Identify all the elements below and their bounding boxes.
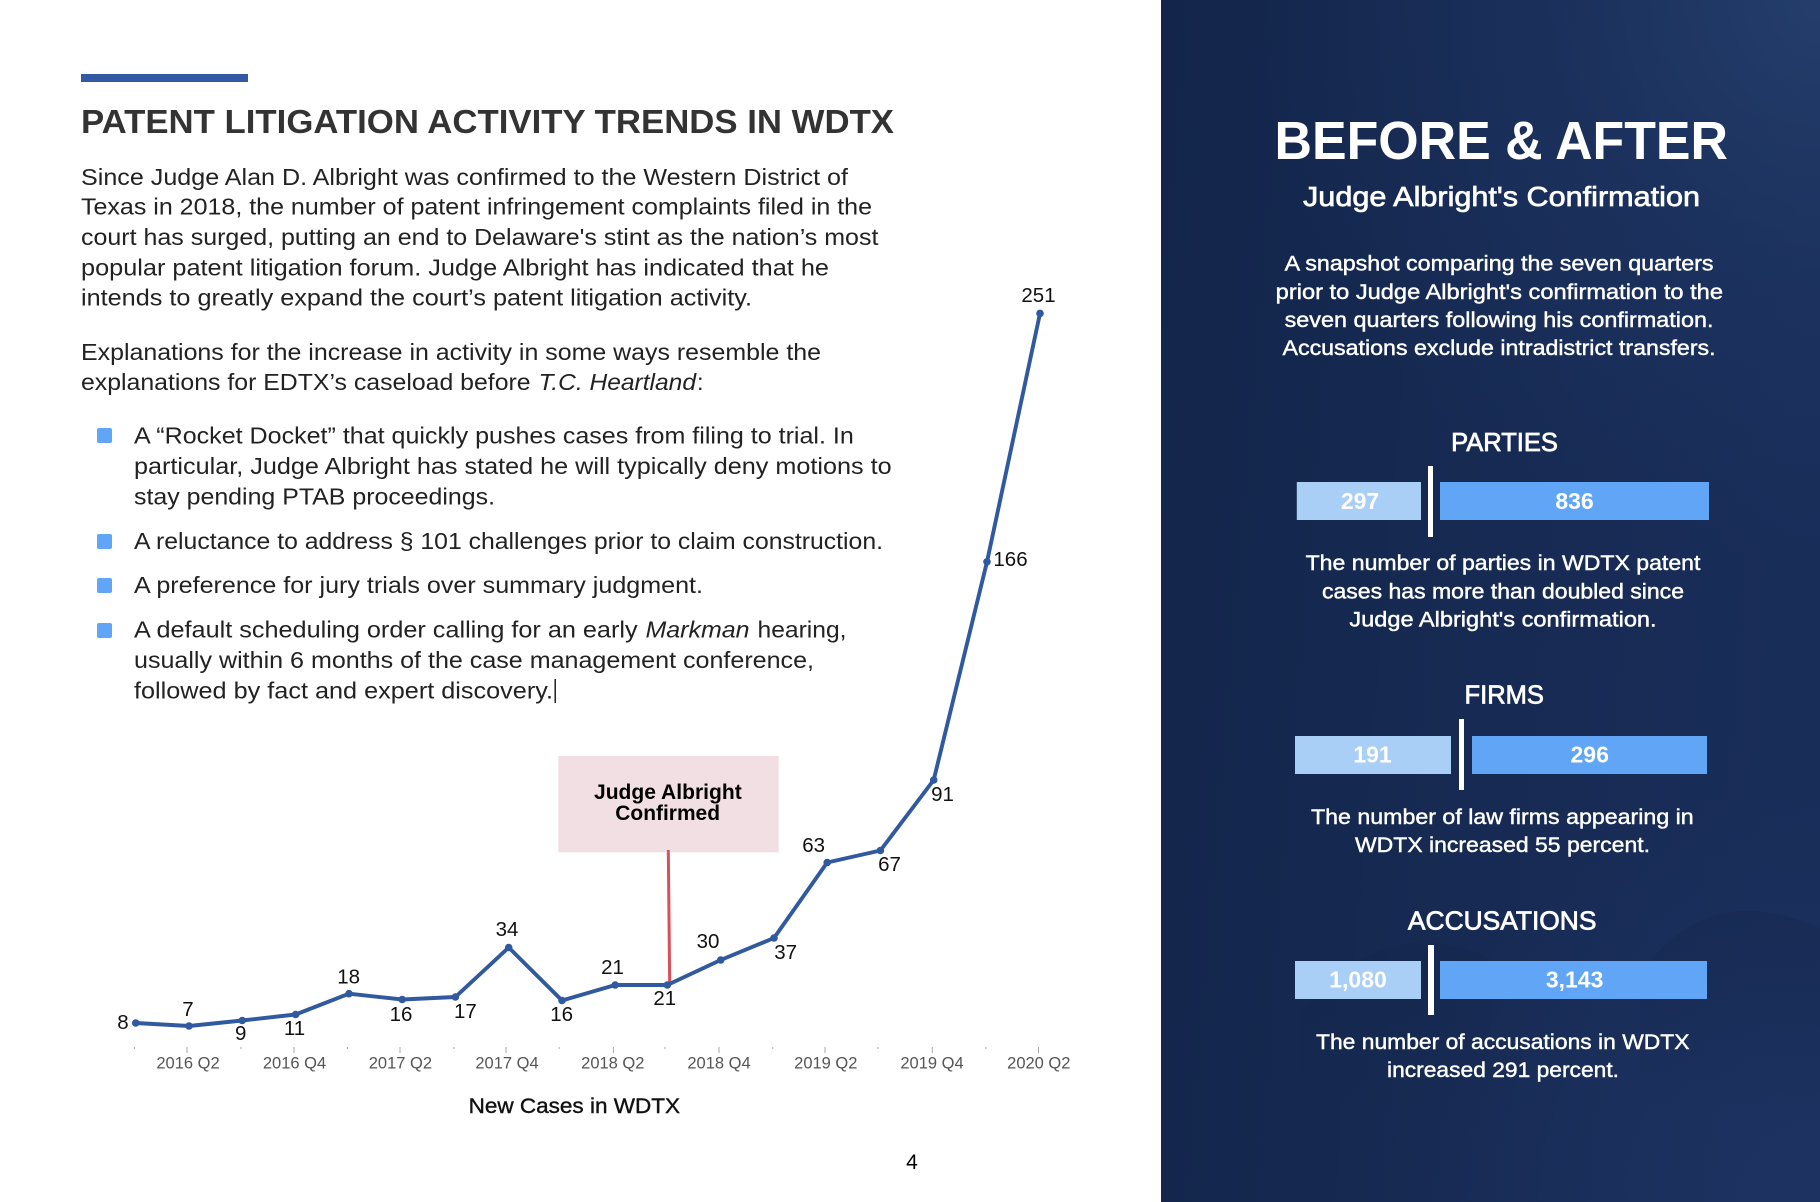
bullet text 1: stay pending PTAB proceedings.: [134, 484, 495, 510]
text block: intro paragraph: Texas in 2018, the number of patent infringement complaints filed in the: [81, 194, 872, 220]
bar: parties before: [1297, 482, 1421, 520]
data labels: 21: [653, 987, 676, 1010]
text block: intro paragraph: court has surged, putting an end to Delaware's stint as the nation’s most: [81, 224, 879, 250]
callout: Judge Albright confirmed: Judge Albright: [594, 780, 742, 804]
data labels: 17: [454, 1000, 477, 1023]
panel background: [1161, 0, 1820, 1202]
heading: accusations: ACCUSATIONS: [1408, 907, 1596, 935]
callout: Judge Albright confirmed: [558, 756, 779, 852]
bullet text 4: hearing,: [758, 617, 846, 643]
intro text: Accusations exclude intradistrict transfers.: [1282, 336, 1716, 360]
bullet text 3: A preference for jury trials over summary judgment.: [134, 572, 703, 598]
section: parties: [1297, 429, 1709, 632]
x axis: [134, 1047, 1070, 1072]
text block: explanations paragraph: Explanations for the increase in activity in some ways resemble the: [81, 339, 821, 365]
text block: explanations paragraph: explanations for EDTX’s caseload before: [81, 369, 531, 395]
data labels: 7: [182, 998, 194, 1021]
accent bar: [81, 74, 248, 82]
caption: accusations: increased 291 percent.: [1387, 1058, 1619, 1082]
caption: accusations: [1316, 1030, 1690, 1082]
data labels: 251: [1021, 284, 1056, 307]
page number: 4: [906, 1151, 918, 1174]
data labels: 67: [878, 853, 901, 876]
data series: [132, 310, 1044, 1030]
value: accusations before: 1,080: [1329, 966, 1387, 992]
data labels: 30: [697, 930, 719, 953]
caption: parties: The number of parties in WDTX patent: [1306, 551, 1700, 575]
caption: firms: [1311, 805, 1694, 857]
bullet text 4: Markman: [646, 617, 750, 643]
data labels: 18: [337, 966, 360, 988]
caption: parties: cases has more than doubled since: [1322, 580, 1684, 604]
intro text: prior to Judge Albright's confirmation to the: [1276, 280, 1723, 304]
bullet marker 2: [97, 534, 112, 549]
bullet text 4: [134, 617, 846, 704]
text block: explanations paragraph: T.C. Heartland: [538, 369, 697, 395]
heading: firms: FIRMS: [1465, 682, 1544, 710]
value: parties before: 297: [1341, 488, 1379, 514]
heading: parties: PARTIES: [1451, 429, 1558, 457]
value: firms before: 191: [1353, 742, 1392, 768]
heading: PATENT LITIGATION ACTIVITY TRENDS IN WDTX: [81, 103, 894, 140]
intro text: A snapshot comparing the seven quarters: [1285, 252, 1714, 276]
bullet text 1: [134, 423, 892, 510]
bar: accusations before: [1295, 961, 1421, 999]
bar: parties after: [1440, 482, 1709, 520]
bullet text 1: particular, Judge Albright has stated he will typically deny motions to: [134, 453, 892, 479]
panel: before and after: [1161, 0, 1820, 1202]
bullet text 4: A default scheduling order calling for an early: [134, 617, 638, 643]
bullet marker 4: [97, 623, 112, 638]
text block: intro paragraph: popular patent litigation forum. Judge Albright has indicated that he: [81, 254, 829, 280]
x axis: 2018 Q4: [687, 1054, 751, 1072]
x axis: 2020 Q2: [1007, 1054, 1070, 1072]
x axis: 2017 Q2: [369, 1054, 432, 1072]
intro text: seven quarters following his confirmation.: [1285, 308, 1714, 332]
text block: explanations paragraph: :: [697, 369, 704, 395]
panel subtitle: Judge Albright's Confirmation: [1303, 181, 1700, 212]
caption: firms: WDTX increased 55 percent.: [1355, 833, 1650, 857]
data labels: 9: [235, 1022, 246, 1045]
line chart: new cases in WDTX: [117, 284, 1070, 1118]
divider: firms: [1459, 719, 1464, 790]
x axis: 2019 Q4: [900, 1054, 964, 1072]
x axis: 2016 Q2: [156, 1054, 220, 1072]
bullet text 2: A reluctance to address § 101 challenges prior to claim construction.: [134, 528, 883, 554]
bullet marker 3: [97, 578, 112, 593]
bullet text 4: followed by fact and expert discovery.: [134, 678, 553, 704]
data labels: 91: [931, 783, 954, 806]
panel title: BEFORE & AFTER: [1274, 111, 1728, 171]
callout connector: [668, 850, 670, 985]
divider: parties: [1428, 466, 1433, 537]
bullet list: [97, 423, 892, 704]
data labels: 16: [390, 1003, 412, 1026]
x axis: 2018 Q2: [581, 1054, 644, 1072]
data labels: 16: [550, 1003, 573, 1026]
text block: intro paragraph: [81, 164, 879, 310]
bullet text 4: usually within 6 months of the case management conference,: [134, 647, 814, 673]
value: accusations after: 3,143: [1546, 966, 1603, 992]
text block: explanations paragraph: [81, 339, 821, 395]
bar: firms before: [1295, 736, 1451, 774]
x axis: 2019 Q2: [794, 1054, 857, 1072]
x axis: 2017 Q4: [475, 1054, 539, 1072]
data labels: 166: [993, 548, 1028, 571]
caption: parties: Judge Albright's confirmation.: [1349, 608, 1657, 632]
data labels: 37: [774, 941, 797, 964]
data labels: 21: [601, 956, 624, 979]
value: parties after: 836: [1555, 488, 1594, 514]
bullet marker 1: [97, 428, 112, 443]
bullet text 1: A “Rocket Docket” that quickly pushes cases from filing to trial. In: [134, 423, 854, 449]
x axis: 2016 Q4: [263, 1054, 326, 1072]
value: firms after: 296: [1571, 742, 1609, 768]
text block: intro paragraph: Since Judge Alan D. Albright was confirmed to the Western District of: [81, 164, 848, 190]
section: accusations: [1295, 907, 1707, 1082]
bar: accusations after: [1440, 961, 1707, 999]
divider: accusations: [1428, 945, 1434, 1015]
intro text: [1276, 252, 1723, 360]
chart title: New Cases in WDTX: [469, 1094, 680, 1118]
data labels: 8: [117, 1011, 129, 1034]
data labels: 63: [802, 834, 825, 857]
section: firms: [1295, 682, 1707, 857]
callout: Judge Albright confirmed: Confirmed: [615, 801, 720, 825]
caption: parties: [1306, 551, 1700, 632]
data labels: 34: [496, 918, 518, 941]
bar: firms after: [1472, 736, 1707, 774]
data labels: 11: [284, 1017, 305, 1040]
caption: firms: The number of law firms appearing in: [1311, 805, 1694, 829]
caption: accusations: The number of accusations in WDTX: [1316, 1030, 1690, 1054]
text block: intro paragraph: intends to greatly expand the court’s patent litigation activity.: [81, 284, 752, 310]
data labels: [117, 284, 1056, 1045]
